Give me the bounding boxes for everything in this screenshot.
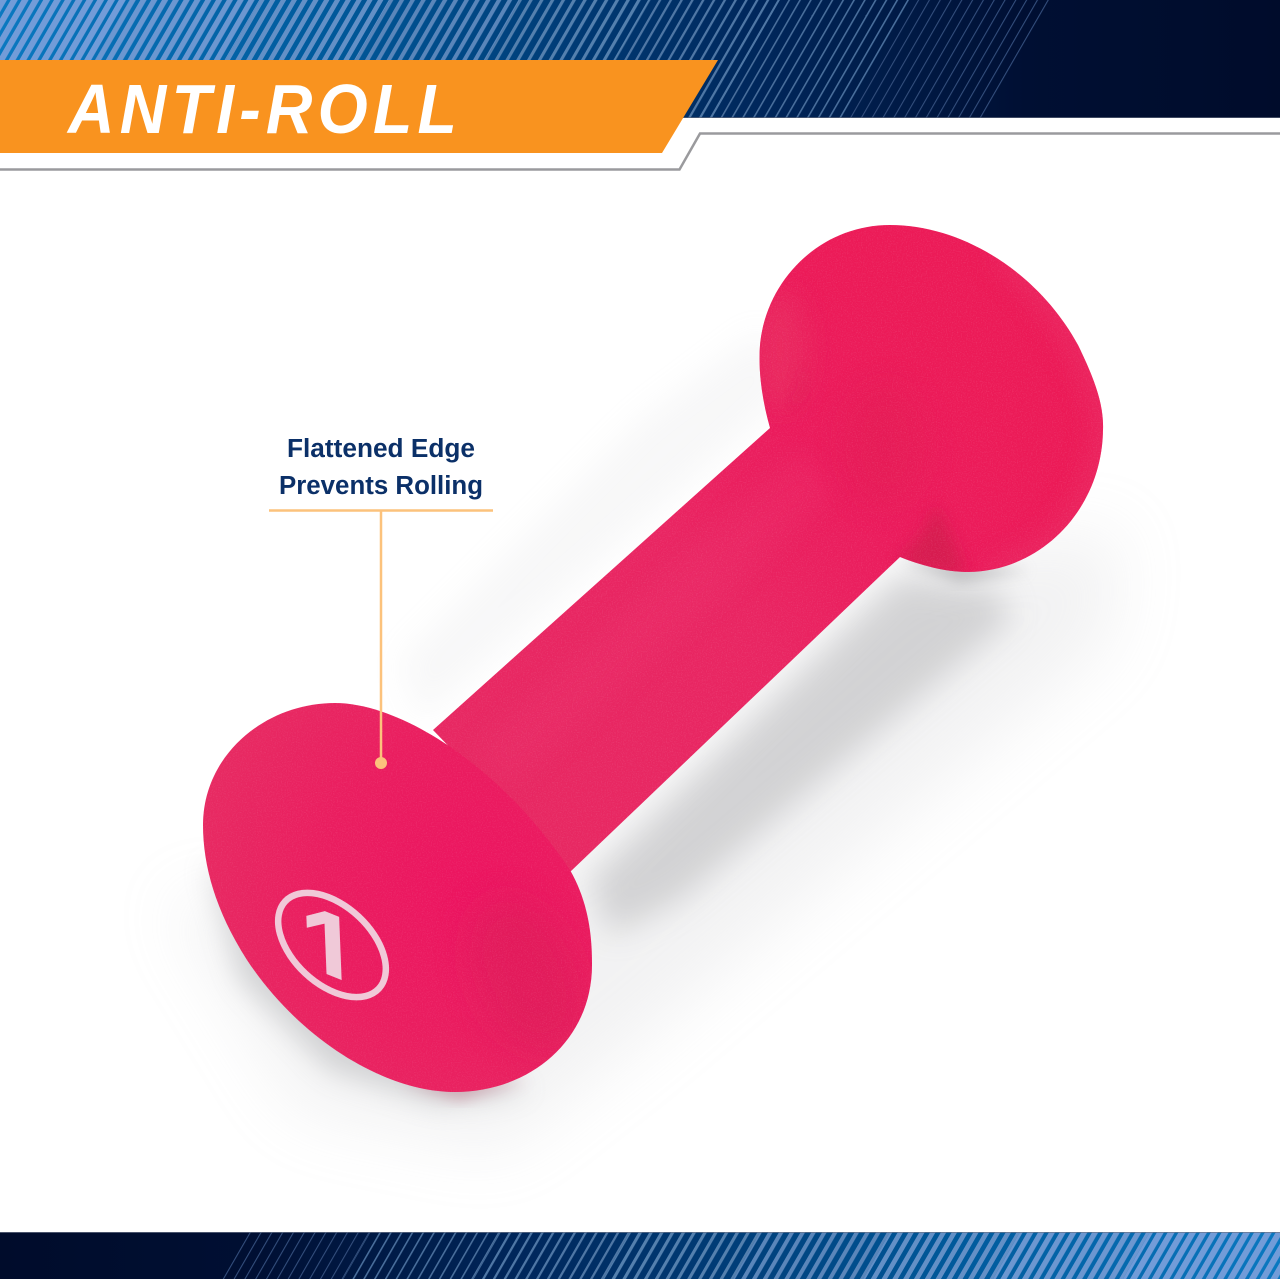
orange title banner (0, 60, 718, 153)
callout leader line (380, 510, 382, 763)
callout horizontal rule (269, 509, 493, 512)
grey header rule (0, 134, 1280, 170)
weight badge ring (259, 873, 405, 1017)
title: ANTI-ROLL (66, 71, 462, 149)
header band with diagonal stripes (0, 0, 1280, 118)
callout text: Flattened Edge (287, 435, 475, 463)
dumbbell (195, 215, 1120, 1100)
callout text (279, 435, 483, 500)
footer band with diagonal stripes (0, 1232, 1280, 1279)
callout text: Prevents Rolling (279, 472, 483, 500)
callout (269, 435, 493, 769)
dumbbell upper head and handle (420, 215, 1120, 885)
weight number: 1 (297, 877, 364, 1025)
callout dot (375, 757, 387, 769)
dumbbell lower head (195, 695, 604, 1100)
soft floor shadows (170, 330, 1120, 1150)
